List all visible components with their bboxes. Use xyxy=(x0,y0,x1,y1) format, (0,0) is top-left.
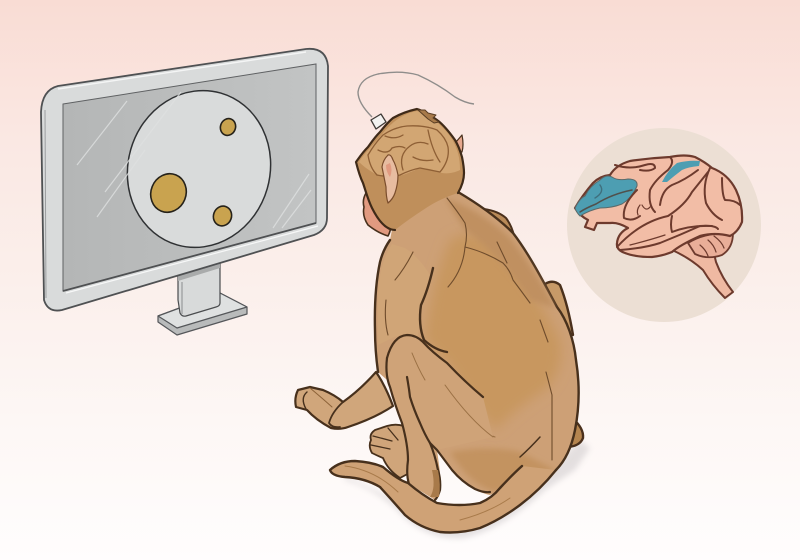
brain inset circle xyxy=(567,128,761,322)
foot xyxy=(370,425,415,478)
cerebrum xyxy=(575,156,742,257)
parietal blue region xyxy=(662,161,700,182)
sulci xyxy=(580,157,740,250)
far ear xyxy=(456,135,463,153)
near ear xyxy=(382,155,398,203)
arm-torso fold xyxy=(420,268,447,352)
cerebellum xyxy=(688,233,733,257)
far shoulder xyxy=(484,209,514,236)
target dot small xyxy=(218,116,238,138)
monitor xyxy=(41,49,328,335)
brain stem xyxy=(672,240,733,298)
far buttock xyxy=(560,418,583,447)
head fur top xyxy=(359,111,460,176)
tail xyxy=(330,461,556,532)
electrode cable xyxy=(358,72,474,117)
electrode connector xyxy=(371,114,386,129)
monitor screen xyxy=(63,64,316,291)
torso xyxy=(375,180,579,495)
brain diagram xyxy=(575,156,742,298)
brain overlay veins on skull xyxy=(368,126,448,176)
floor shadow xyxy=(345,440,590,538)
monitor stand xyxy=(158,258,247,335)
frontal blue region xyxy=(575,176,637,216)
head xyxy=(356,109,464,236)
lower body shading xyxy=(450,448,555,492)
near arm to hand xyxy=(295,372,393,429)
target dot large xyxy=(145,168,192,218)
back creases xyxy=(385,198,552,460)
near thigh and leg xyxy=(386,335,493,500)
upper back shading xyxy=(445,198,555,308)
skull fill xyxy=(356,109,464,230)
monitor frame xyxy=(41,49,328,311)
skull outline xyxy=(356,109,464,230)
muzzle xyxy=(363,190,391,236)
fur tuft xyxy=(418,110,439,123)
glass reflections xyxy=(77,92,311,228)
far arm behind back xyxy=(545,282,573,335)
back central shading xyxy=(425,234,561,430)
target dot medium xyxy=(211,204,234,228)
monkey xyxy=(295,109,590,538)
shoulder highlight xyxy=(378,244,430,345)
screen circle xyxy=(109,73,289,265)
